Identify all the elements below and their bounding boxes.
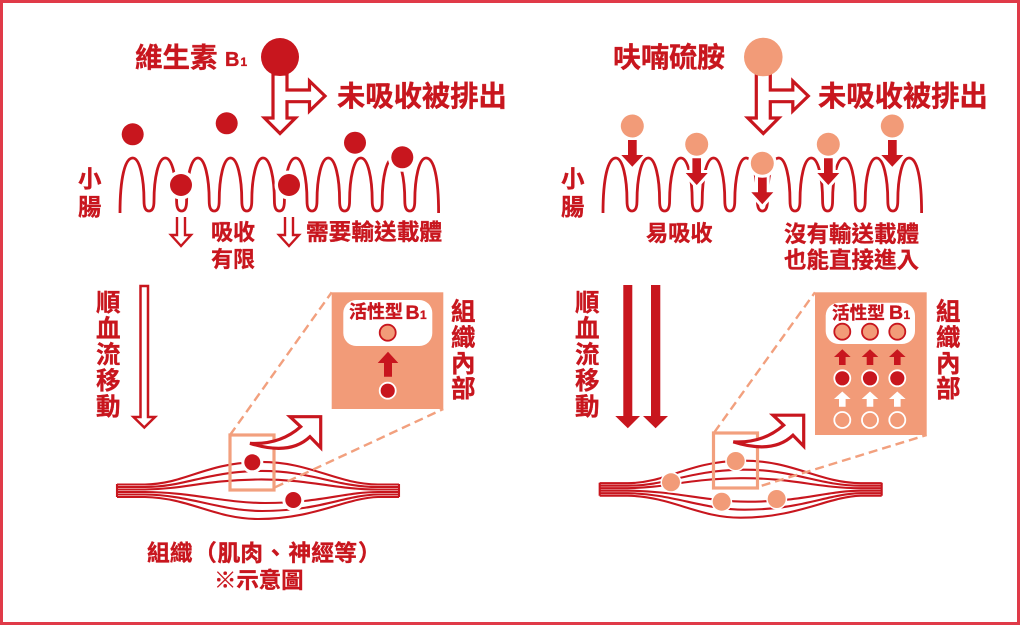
molecules in muscle: [662, 452, 786, 511]
heading: vitamin B1: 1: [240, 55, 248, 69]
arrow: split down and right: [748, 74, 808, 134]
label: not absorbed, excreted: 未吸收被排出: [337, 80, 507, 112]
label: inside tissue: 內: [451, 351, 476, 378]
label: not absorbed, excreted: 未吸收被排出: [818, 80, 988, 112]
inset: inside tissue: 活性型: [832, 303, 885, 323]
caption: tissues: ）: [358, 535, 381, 568]
label: moves through blood: 血: [575, 315, 600, 343]
label: limited absorption: 吸收: [211, 220, 255, 245]
inset: inside tissue: B: [406, 302, 420, 324]
label: inside tissue: 織: [936, 324, 960, 352]
panel: vitamin B1: [78, 38, 507, 593]
label: small intestine: 腸: [561, 194, 584, 220]
heading: vitamin B1: B: [225, 49, 239, 71]
diagram: muscle fibres: [117, 462, 399, 519]
arrow: limited absorption 2: [279, 217, 299, 246]
arrow: zoom in: [733, 415, 804, 447]
zoom dashed lines: [714, 292, 927, 486]
inset: inside tissue: [815, 292, 927, 435]
label: moves through blood: 動: [575, 393, 600, 421]
icon: large B1 molecule: [261, 38, 299, 76]
inset: inside tissue: 活性型: [349, 302, 403, 322]
arrow: limited absorption 1: [171, 217, 191, 246]
inset: inside tissue: 1: [420, 308, 427, 322]
zoom box: [230, 435, 274, 490]
molecules with absorption arrows: [621, 114, 904, 204]
diagram: intestinal villi: [120, 158, 439, 213]
caption: tissues: 肌肉: [218, 540, 263, 566]
inset: inside tissue: B: [889, 302, 903, 324]
label: moves through blood: 動: [96, 393, 120, 421]
heading: vitamin B1: 維生素: [135, 42, 218, 73]
label: enters directly without transporter: 沒有輸送載體: [784, 222, 919, 247]
label: moves through blood: 流: [96, 341, 120, 369]
arrow: blood flow: [134, 286, 155, 428]
inset: inside tissue: 1: [904, 308, 910, 322]
label: inside tissue: 組: [936, 299, 960, 326]
diagram: intestinal villi: [603, 158, 922, 213]
label: enters directly without transporter: 也能直接進入: [784, 248, 919, 273]
label: moves through blood: 移: [96, 367, 120, 395]
diagram: muscle fibres: [600, 461, 882, 518]
label: moves through blood: 移: [575, 367, 600, 395]
zoom dashed lines: [230, 292, 443, 487]
label: moves through blood: 血: [96, 315, 120, 343]
label: small intestine: 小: [561, 166, 584, 192]
molecule in muscle 1: [244, 454, 260, 470]
label: inside tissue: 內: [936, 351, 960, 378]
label: moves through blood: 順: [96, 290, 120, 317]
label: requires transporter: 需要輸送載體: [306, 219, 442, 245]
heading: fursultiamine: 呋喃硫胺: [613, 41, 725, 73]
molecule in muscle 2: [285, 492, 301, 508]
caption: tissues: 、: [264, 535, 287, 568]
zoom box: [714, 433, 758, 488]
label: inside tissue: 部: [451, 375, 476, 403]
caption: tissues: 組織: [147, 540, 193, 566]
label: small intestine: 小: [78, 166, 102, 192]
label: moves through blood: 流: [575, 341, 600, 369]
icon: large fursultiamine molecule: [744, 38, 783, 76]
label: inside tissue: 部: [936, 375, 960, 403]
caption: tissues: 神經等: [288, 540, 357, 566]
panel: fursultiamine: [561, 38, 988, 518]
arrow: zoom in: [250, 417, 321, 448]
label: small intestine: 腸: [78, 194, 102, 220]
caption: tissues: （: [194, 535, 217, 568]
inset: inside tissue: [332, 292, 443, 409]
label: inside tissue: 組: [451, 299, 476, 326]
label: inside tissue: 織: [451, 324, 476, 352]
molecules above and in villi: [122, 112, 413, 196]
label: moves through blood: 順: [575, 290, 600, 317]
arrow: split down and right: [264, 74, 325, 134]
note: schematic: ※示意圖: [214, 568, 304, 593]
label: limited absorption: 有限: [211, 247, 255, 272]
arrow: blood flow 2: [643, 285, 668, 428]
label: easily absorbed: 易吸收: [646, 221, 713, 246]
arrow: blood flow 1: [615, 285, 640, 428]
